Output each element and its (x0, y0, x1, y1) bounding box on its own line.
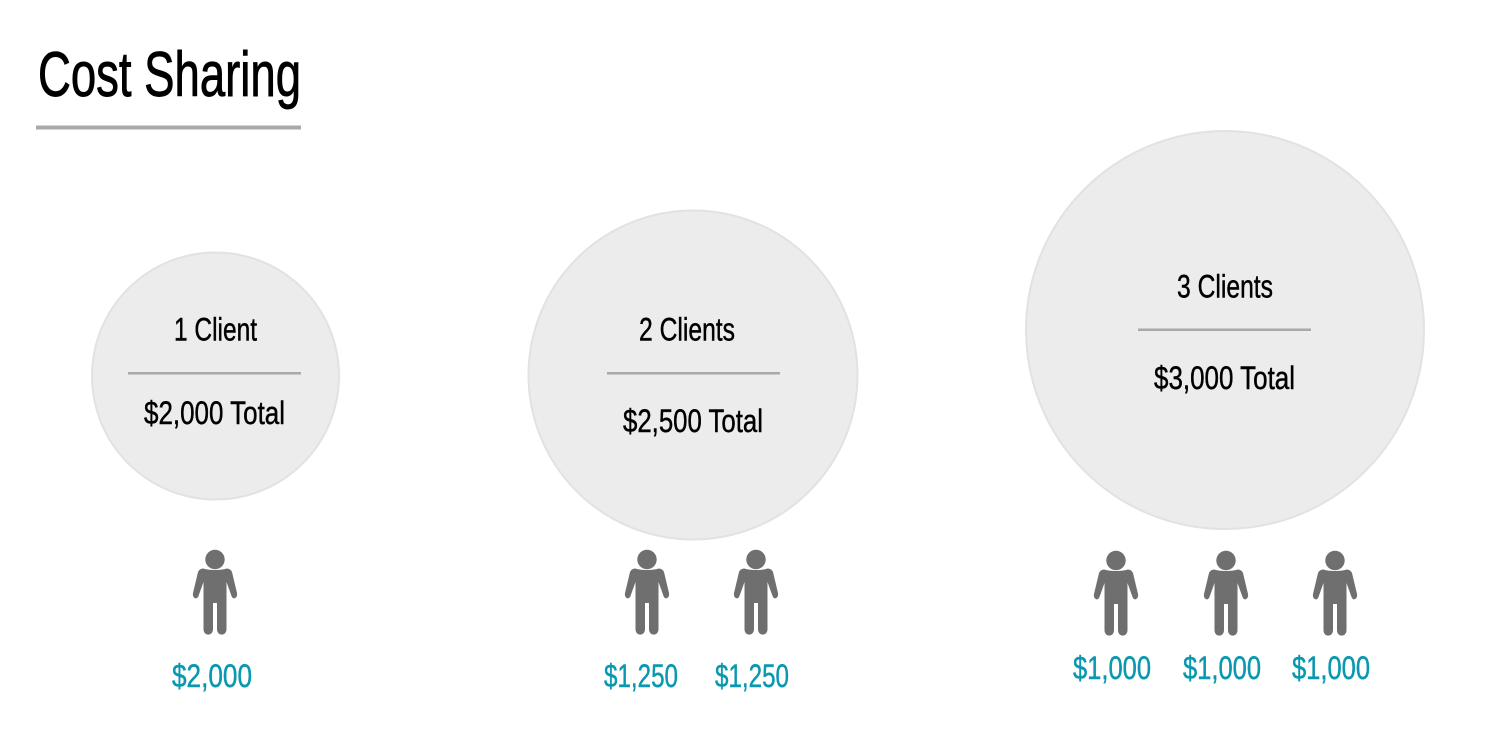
share: 2000: $2,000 (172, 658, 252, 694)
circle: 3 clients (1026, 131, 1424, 529)
panel: 2 clients (528, 210, 858, 694)
share: 1000: $1,000 (1292, 650, 1370, 686)
icon: person (625, 550, 669, 635)
icon: person (1204, 551, 1248, 636)
panel: 1 client (92, 252, 339, 694)
label: 2 clients: 2 Clients (639, 312, 735, 348)
share: 1000: $1,000 (1183, 650, 1261, 686)
icon: person (1094, 551, 1138, 636)
icon: person (193, 550, 237, 635)
label: 1 client: 1 Client (174, 312, 257, 348)
icon: person (734, 550, 778, 635)
share: 1250: $1,250 (604, 658, 678, 694)
label: 3 clients: 3 Clients (1177, 268, 1273, 304)
panel: 3 clients (1026, 131, 1424, 686)
title (36, 40, 301, 130)
title: Cost Sharing (38, 40, 301, 110)
share: 1000: $1,000 (1073, 650, 1151, 686)
icon: person (1313, 551, 1357, 636)
label: 3000 total: $3,000 Total (1154, 360, 1295, 396)
label: 2500 total: $2,500 Total (623, 403, 763, 439)
circle: 2 clients (528, 210, 858, 540)
circle: 1 client (92, 252, 339, 500)
label: 2000 total: $2,000 Total (144, 395, 285, 431)
share: 1250: $1,250 (715, 658, 789, 694)
